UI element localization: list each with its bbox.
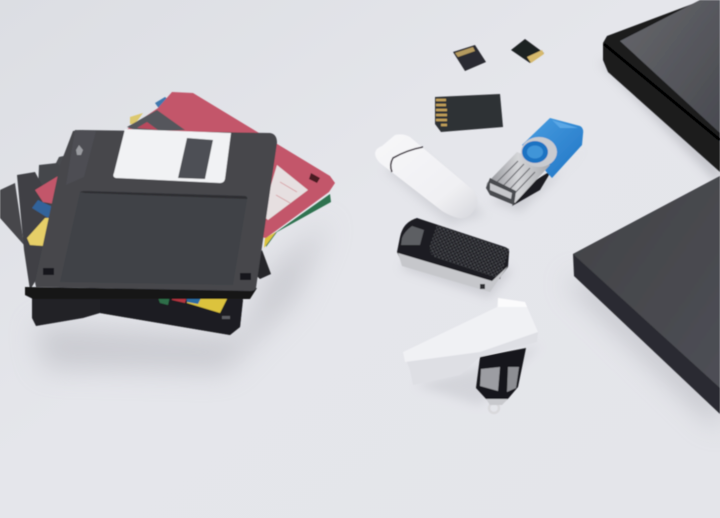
USB stick: white with loop xyxy=(375,134,485,225)
black body xyxy=(476,348,526,400)
floppy: yellow disk corner xyxy=(27,218,52,246)
white cap xyxy=(403,298,538,385)
floppy: recessed label area xyxy=(60,191,247,285)
USB stick: white swivel with black body xyxy=(403,298,540,413)
floppy: bottom coloured edges xyxy=(187,297,228,313)
floppy: left fanned black disks xyxy=(45,155,75,205)
metal loop xyxy=(486,152,550,203)
external drive: top right tablet xyxy=(600,0,720,185)
floppy: white metal shutter xyxy=(113,129,231,183)
floppy: dark shutter on red disk xyxy=(127,110,185,132)
floppy: top black disk xyxy=(25,129,277,299)
floppy disk stack xyxy=(0,92,335,335)
floppy: red disk xyxy=(35,92,335,238)
floppy: green disk edge xyxy=(265,194,331,247)
floppy: shutter rail xyxy=(66,130,96,185)
USB stick: blue swivel xyxy=(486,118,590,212)
blue disc xyxy=(521,137,557,167)
black rear xyxy=(512,170,552,206)
external drive: lower right black box xyxy=(565,176,720,430)
shadow: floppy stack xyxy=(36,220,330,372)
metal ring xyxy=(489,403,499,413)
memory card: small top-right xyxy=(511,39,544,63)
USB stick: black carbon xyxy=(397,218,512,298)
memory card: SD card xyxy=(435,94,503,132)
floppy: write-protect holes xyxy=(43,268,54,275)
blue cap xyxy=(522,118,583,178)
floppy: lower black disks xyxy=(32,298,243,335)
floppy: blue disk edge xyxy=(32,200,55,218)
memory card: small top-left xyxy=(453,45,486,71)
